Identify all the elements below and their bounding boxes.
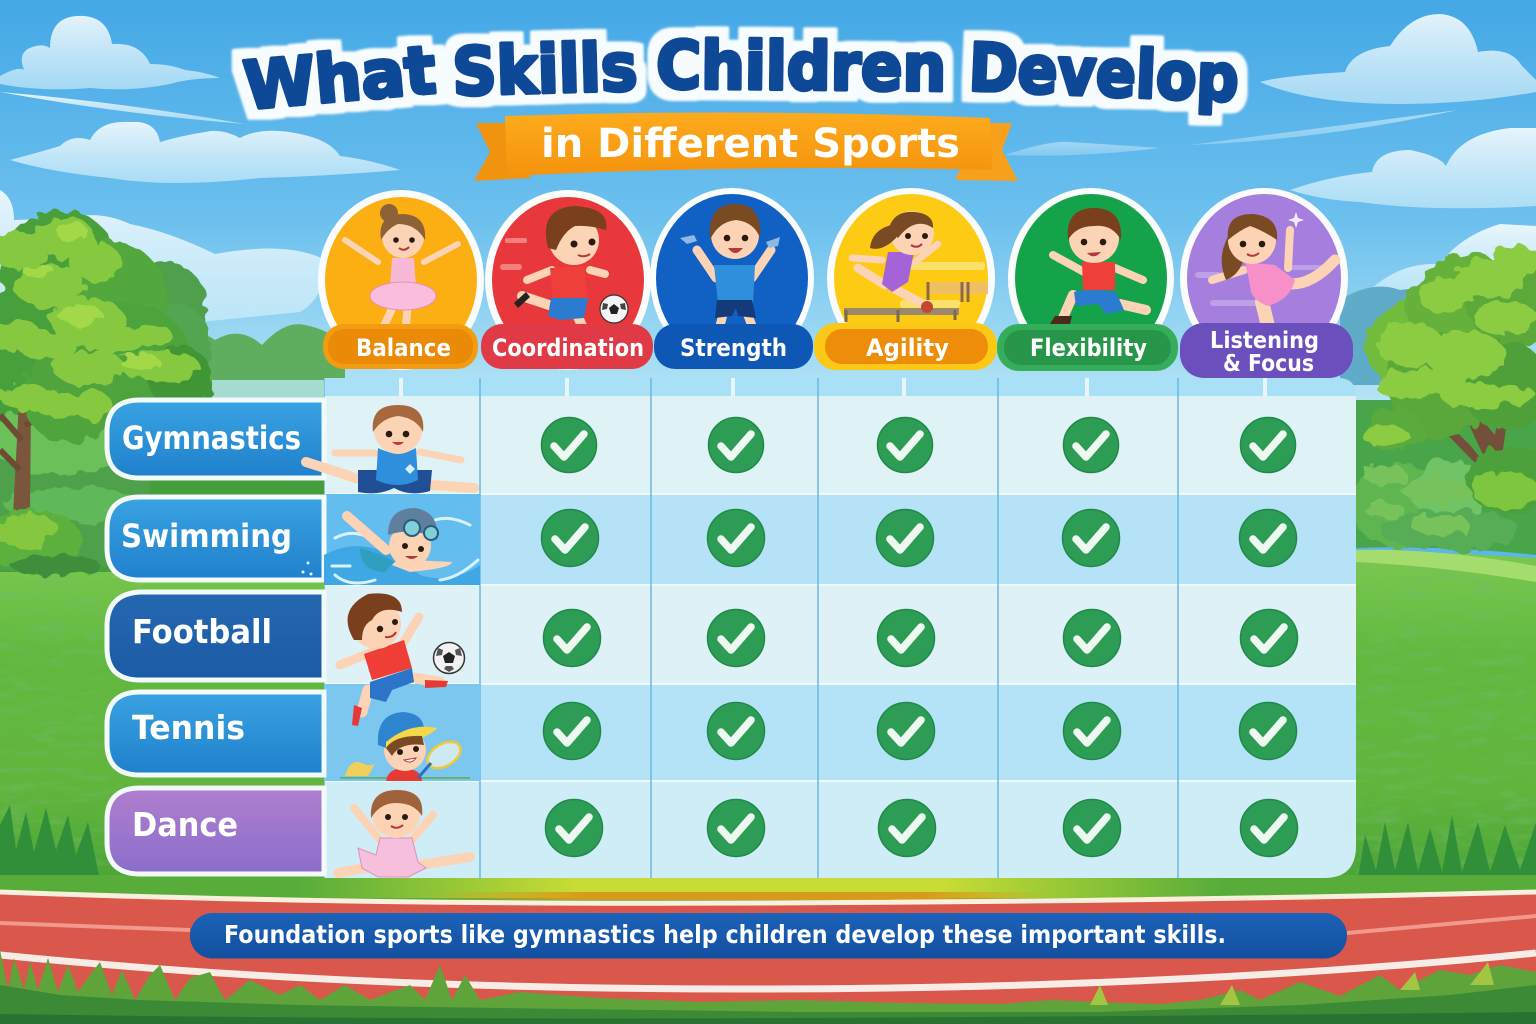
skill pill: Listening & Focus: Listening bbox=[1210, 328, 1319, 354]
skill pill: Balance bbox=[323, 324, 478, 369]
title: Skills bbox=[451, 29, 638, 111]
skill icon: Balance bbox=[318, 190, 484, 370]
skill icon: Strength bbox=[650, 188, 814, 368]
check marks: Football row bbox=[544, 610, 1298, 666]
left tree and bushes bbox=[0, 210, 324, 575]
row label: Swimming: Swimming bbox=[121, 517, 292, 555]
row label: Gymnastics: Gymnastics bbox=[122, 419, 301, 457]
skill icon: Listening & Focus bbox=[1180, 188, 1348, 368]
title: Develop bbox=[967, 29, 1240, 117]
row label: Tennis: Tennis bbox=[132, 708, 245, 747]
row label: Tennis bbox=[107, 692, 324, 775]
skill pill: Coordination: Coordination bbox=[492, 334, 644, 362]
figure: gymnast in a split leap bbox=[306, 405, 474, 493]
skill pill: Listening & Focus: & Focus bbox=[1223, 351, 1314, 377]
row label: Dance: Dance bbox=[132, 805, 238, 844]
check marks: Tennis row bbox=[544, 702, 1296, 760]
grass edge above the track bbox=[0, 875, 1536, 906]
skill pill: Coordination bbox=[481, 324, 653, 369]
running track bbox=[0, 892, 1536, 1024]
check marks: Swimming row bbox=[542, 510, 1296, 566]
table rows bbox=[324, 378, 1356, 878]
clouds bbox=[0, 14, 1536, 330]
skill pill: Agility: Agility bbox=[866, 334, 949, 362]
skill pill: Balance: Balance bbox=[356, 334, 451, 362]
title: Children bbox=[656, 27, 947, 107]
skill icon: Agility bbox=[827, 188, 995, 368]
skill pill: Strength: Strength bbox=[680, 334, 787, 362]
skill pill: Flexibility: Flexibility bbox=[1030, 334, 1147, 362]
title: What bbox=[241, 31, 439, 125]
title bbox=[241, 27, 1240, 125]
grass tufts beside the table bbox=[0, 805, 1536, 880]
check marks: Dance row bbox=[546, 800, 1298, 856]
figure: dance girl bbox=[338, 790, 470, 877]
skill icon: Coordination bbox=[485, 190, 651, 370]
foreground grass bbox=[0, 950, 1536, 1024]
right tree and bushes bbox=[1350, 246, 1536, 582]
footer message bar: Foundation sports like gymnastics help children develop these important skills. bbox=[224, 920, 1226, 949]
skill icon: Flexibility bbox=[1008, 188, 1174, 368]
check marks: Gymnastics row bbox=[542, 418, 1296, 472]
row label: Football bbox=[107, 592, 324, 680]
figure: boy kicking a football bbox=[340, 593, 464, 726]
row label: Dance bbox=[107, 788, 324, 874]
table bbox=[324, 378, 1356, 878]
footer message bar bbox=[190, 913, 1347, 958]
skill pill: Listening & Focus bbox=[1180, 323, 1353, 378]
subtitle ribbon: in Different Sports bbox=[541, 121, 960, 167]
skill pill: Agility bbox=[814, 323, 997, 370]
row label: Football: Football bbox=[132, 612, 272, 651]
row label: Gymnastics bbox=[107, 400, 324, 478]
icon: football bbox=[434, 642, 464, 674]
sky background bbox=[0, 0, 1536, 400]
row label: Swimming bbox=[107, 497, 324, 580]
distant tree line bbox=[150, 287, 1480, 400]
figure: tennis player bbox=[340, 712, 470, 781]
subtitle ribbon bbox=[474, 112, 1018, 181]
meadow bbox=[0, 550, 1536, 890]
skill pill: Strength bbox=[654, 324, 813, 369]
skill pill: Flexibility bbox=[997, 324, 1178, 371]
grass texture bbox=[0, 560, 1536, 880]
figure: swimmer in water bbox=[302, 508, 480, 585]
